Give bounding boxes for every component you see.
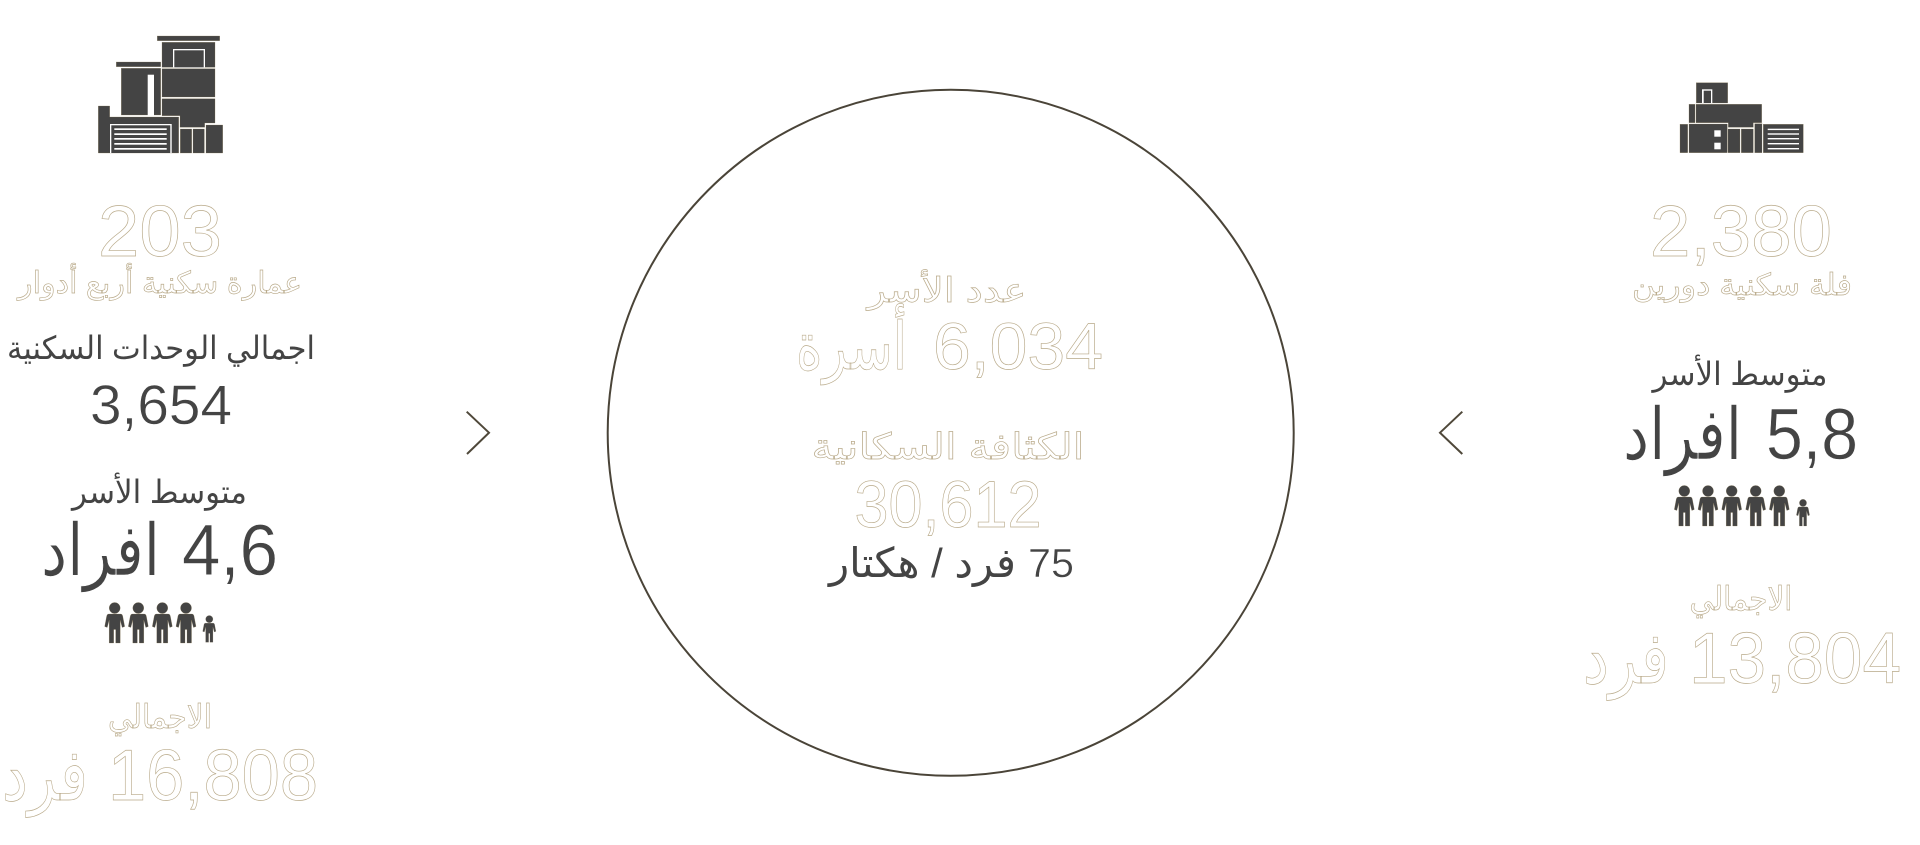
value: 4.6 persons: افراد <box>41 511 160 593</box>
icon: people row <box>1674 486 1810 526</box>
value: 6,034 households: أسرة <box>796 303 907 385</box>
label: villa type: فلة سكنية دورين <box>1632 269 1852 303</box>
value: 6,034 households <box>796 303 1103 385</box>
panel: villas (right column) <box>1583 83 1901 701</box>
label: household average: متوسط الأسر <box>1651 354 1828 393</box>
panel: apartment buildings (left column) <box>2 36 318 818</box>
label: number of households: عدد الأسر <box>865 269 1026 311</box>
value: 5.8 persons: 5,8 <box>1766 395 1858 475</box>
value: 75 persons per hectare: 75 <box>1028 540 1074 586</box>
value: 5.8 persons: افراد <box>1623 395 1742 477</box>
value: 2,380: 2,380 <box>1650 192 1832 272</box>
value: 16,808 persons: فرد <box>2 736 88 818</box>
value: 5.8 persons <box>1623 395 1858 477</box>
label: population density: الكثافة السكانية <box>812 426 1084 467</box>
value: 4.6 persons: 4,6 <box>182 511 278 591</box>
value: 13,804 persons: فرد <box>1583 619 1669 701</box>
value: 6,034 households: 6,034 <box>933 309 1103 383</box>
label: building type: عمارة سكنية أربع أدوار <box>16 262 302 301</box>
icon: four-storey building <box>98 36 223 153</box>
value: 16,808 persons: 16,808 <box>108 736 318 816</box>
label: total: الاجمالي <box>1690 580 1792 618</box>
value: 13,804 persons <box>1583 619 1901 701</box>
label: total housing units: اجمالي الوحدات السكنية <box>7 330 315 367</box>
arrow: left column pointing to circle <box>467 412 489 454</box>
value: 203: 203 <box>98 192 222 272</box>
icon: two-storey villa <box>1680 83 1803 153</box>
panel: central totals <box>796 269 1103 587</box>
icon: people row <box>105 602 216 643</box>
value: 4.6 persons <box>41 511 278 593</box>
label: total: الاجمالي <box>108 698 212 736</box>
value: 30,612: 30,612 <box>854 467 1042 541</box>
value: 13,804 persons: 13,804 <box>1689 619 1901 699</box>
value: 16,808 persons <box>2 736 318 818</box>
central circle <box>608 90 1294 776</box>
value: 75 persons per hectare: فرد / هكتار <box>827 540 1016 587</box>
value: 3,654: 3,654 <box>90 373 232 436</box>
label: household average: متوسط الأسر <box>70 472 247 511</box>
arrow: right column pointing to circle <box>1440 412 1462 454</box>
